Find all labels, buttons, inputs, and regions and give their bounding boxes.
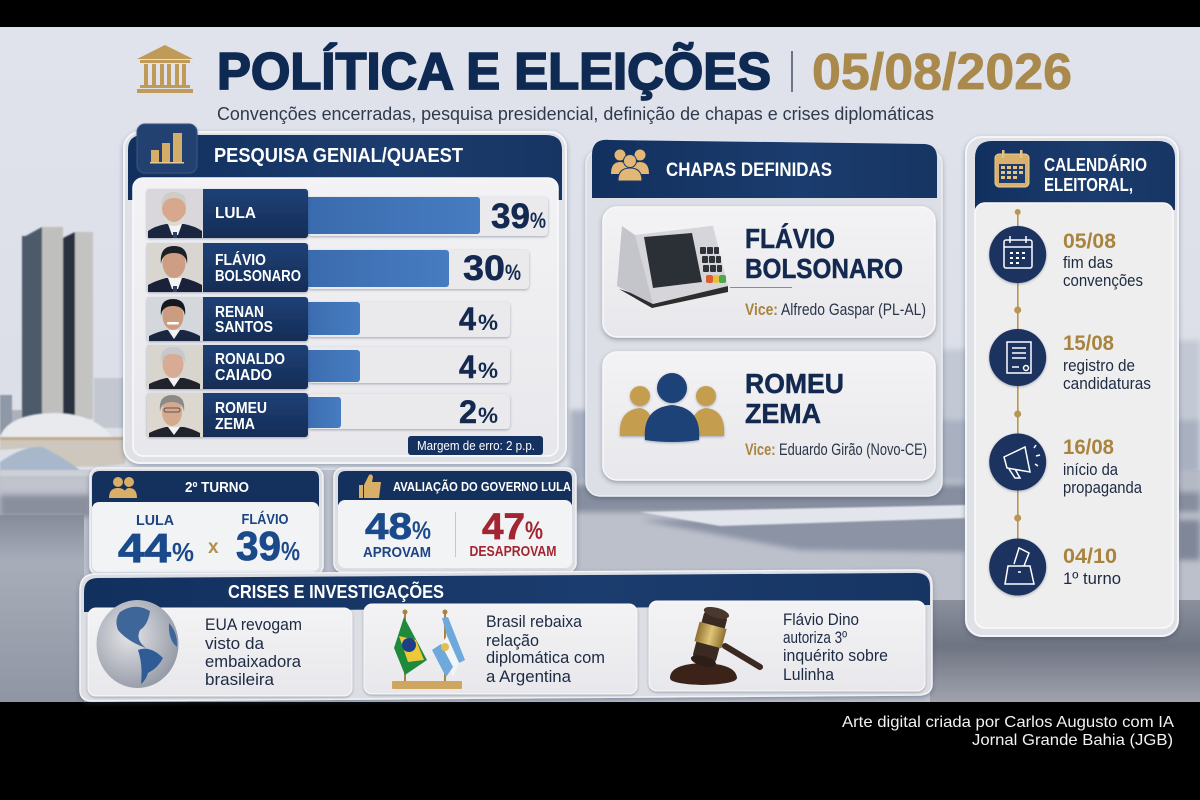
card: Flávio Bolsonaro: BOLSONARO bbox=[745, 253, 903, 284]
heading: crises: CRISES E INVESTIGAÇÕES bbox=[228, 581, 444, 602]
row: Ronaldo Caiado 4%: RONALDO bbox=[215, 351, 285, 368]
card: Flávio Dino: Flávio Dino bbox=[783, 610, 859, 629]
event: 15/08: 15/08 bbox=[1063, 332, 1114, 355]
event: 16/08: início da bbox=[1063, 461, 1119, 479]
card: EUA bbox=[88, 600, 352, 696]
panel: avaliação do governo Lula: 48 bbox=[365, 506, 412, 547]
panel: Chapas Definidas bbox=[586, 140, 942, 496]
event: 05/08 bbox=[989, 226, 1143, 290]
panel: 2º turno bbox=[90, 468, 323, 575]
card: Flávio Dino: autoriza 3º bbox=[783, 628, 847, 647]
row: Ronaldo Caiado 4%: CAIADO bbox=[215, 367, 272, 384]
photo: Lula bbox=[147, 189, 203, 238]
panel: avaliação do governo Lula: AVALIAÇÃO DO GOVERNO LULA bbox=[393, 479, 571, 494]
row: Flávio Bolsonaro 30%: % bbox=[505, 260, 521, 285]
row: Ronaldo Caiado 4%: % bbox=[478, 358, 498, 383]
panel: 2º turno: % bbox=[281, 536, 300, 566]
icon: gavel bbox=[670, 604, 760, 685]
row: Flávio Bolsonaro 30%: BOLSONARO bbox=[215, 268, 301, 285]
card: Brasil e Argentina: diplomática com bbox=[486, 648, 605, 667]
icon: flags bbox=[392, 610, 465, 689]
event: 16/08: 16/08 bbox=[1063, 436, 1114, 459]
row: Lula 39%: % bbox=[530, 208, 546, 233]
row: Flávio Bolsonaro 30% bbox=[147, 243, 529, 292]
panel header bbox=[92, 471, 319, 507]
heading: calendário: CALENDÁRIO bbox=[1044, 154, 1147, 175]
card: Flávio Bolsonaro: Vice: Alfredo Gaspar (PL-AL) bbox=[745, 301, 926, 319]
event: 04/10: 1º turno bbox=[1063, 570, 1121, 588]
photo: Romeu Zema bbox=[147, 393, 203, 437]
row: Renan Santos 4% bbox=[147, 297, 510, 341]
panel header bbox=[128, 135, 562, 200]
card: Flávio Bolsonaro: FLÁVIO bbox=[745, 223, 835, 254]
credit text: Jornal Grande Bahia (JGB) bbox=[972, 732, 1173, 749]
icon: group of people bbox=[611, 150, 649, 181]
panel header bbox=[592, 140, 937, 198]
panel: avaliação do governo Lula: 47 bbox=[482, 506, 525, 547]
row: Renan Santos 4%: RENAN bbox=[215, 304, 264, 321]
row: Lula 39% bbox=[147, 189, 548, 238]
card: Romeu Zema: ROMEU bbox=[745, 368, 844, 399]
row: Ronaldo Caiado 4%: 4 bbox=[459, 349, 476, 385]
panel: avaliação do governo Lula: % bbox=[412, 517, 431, 545]
event: 15/08: candidaturas bbox=[1063, 375, 1151, 393]
timeline line bbox=[1014, 209, 1021, 542]
subtitle: Convenções encerradas, pesquisa presidencial, definição de chapas e crises diplomáticas bbox=[217, 104, 934, 124]
credit text: Arte digital criada por Carlos Augusto com IA bbox=[842, 714, 1174, 731]
card: Flávio Bolsonaro bbox=[603, 207, 935, 337]
credit text bbox=[842, 714, 1174, 749]
panel: Calendário Eleitoral bbox=[966, 137, 1178, 636]
photo: Flávio Bolsonaro bbox=[147, 243, 203, 292]
panel: avaliação do governo Lula: % bbox=[525, 517, 543, 545]
event: 15/08 bbox=[989, 329, 1151, 393]
row: Lula 39%: LULA bbox=[215, 205, 256, 222]
row: Romeu Zema 2%: ROMEU bbox=[215, 400, 267, 417]
icon: calendar bbox=[1004, 236, 1032, 268]
icon: two people bbox=[109, 477, 137, 498]
event: 15/08: registro de bbox=[1063, 357, 1135, 375]
card: Flávio Dino: Lulinha bbox=[783, 665, 835, 684]
event: 04/10 bbox=[989, 538, 1121, 596]
card: Romeu Zema: ZEMA bbox=[745, 398, 821, 429]
panel: avaliação do governo Lula: DESAPROVAM bbox=[470, 543, 556, 560]
card: EUA: embaixadora bbox=[205, 652, 302, 671]
card: Brasil e Argentina: relação bbox=[486, 631, 539, 650]
note: margem de erro: Margem de erro: 2 p.p. bbox=[417, 438, 535, 453]
row: Ronaldo Caiado 4% bbox=[147, 345, 510, 389]
card: Flávio Dino: inquérito sobre bbox=[783, 646, 888, 665]
panel: 2º turno: 2º TURNO bbox=[185, 480, 249, 496]
card: Romeu Zema bbox=[603, 352, 935, 480]
card: Flávio Dino bbox=[649, 601, 925, 691]
row: Flávio Bolsonaro 30%: FLÁVIO bbox=[215, 250, 266, 269]
panel header bbox=[338, 471, 572, 505]
panel: 2º turno: 39 bbox=[236, 523, 281, 569]
row: Romeu Zema 2% bbox=[147, 393, 510, 437]
panel: 2º turno: LULA bbox=[136, 512, 174, 529]
card: EUA: EUA revogam bbox=[205, 615, 302, 634]
panel: Crises e Investigações bbox=[80, 570, 932, 701]
photo: Ronaldo Caiado bbox=[147, 345, 203, 389]
panel header bbox=[975, 141, 1175, 210]
event: 16/08 bbox=[989, 434, 1143, 497]
icon: calendar bbox=[995, 150, 1029, 187]
event: 05/08: 05/08 bbox=[1063, 230, 1116, 253]
icon: document bbox=[1007, 342, 1031, 373]
photo: Renan Santos bbox=[147, 297, 203, 341]
card: EUA: visto da bbox=[205, 634, 265, 653]
event: 05/08: convenções bbox=[1063, 272, 1143, 290]
row: Renan Santos 4%: 4 bbox=[459, 301, 476, 337]
row: Romeu Zema 2%: 2 bbox=[459, 394, 477, 430]
row: Romeu Zema 2%: ZEMA bbox=[215, 416, 255, 433]
icon: megaphone bbox=[1004, 445, 1040, 478]
event: 16/08: propaganda bbox=[1063, 479, 1143, 497]
panel: avaliação do governo Lula bbox=[334, 468, 576, 572]
row: Renan Santos 4%: % bbox=[478, 310, 498, 335]
card: Romeu Zema: Vice: Eduardo Girão (Novo-CE) bbox=[745, 441, 927, 459]
panel header bbox=[84, 573, 930, 612]
row: Romeu Zema 2%: % bbox=[478, 403, 498, 428]
icon: ballot box bbox=[1005, 548, 1034, 584]
panel: 2º turno: x bbox=[208, 537, 219, 558]
heading: date: 05/08/2026 bbox=[812, 43, 1072, 100]
event: 05/08: fim das bbox=[1063, 254, 1113, 272]
icon: thumbs up bbox=[359, 474, 381, 498]
row: Lula 39%: 39 bbox=[491, 197, 530, 236]
heading: chapas: CHAPAS DEFINIDAS bbox=[666, 160, 832, 181]
card: EUA: brasileira bbox=[205, 670, 275, 689]
card: Brasil e Argentina bbox=[364, 604, 637, 694]
icon: voting machine bbox=[617, 222, 792, 308]
panel: Calendário Eleitoral: ELEITORAL, bbox=[1044, 175, 1133, 195]
panel: avaliação do governo Lula: APROVAM bbox=[363, 544, 431, 561]
icon: candidates group bbox=[620, 373, 724, 442]
panel: 2º turno: FLÁVIO bbox=[242, 511, 289, 528]
row: Renan Santos 4%: SANTOS bbox=[215, 319, 273, 336]
panel: Pesquisa Genial/Quaest bbox=[124, 124, 566, 463]
event: 04/10: 04/10 bbox=[1063, 545, 1117, 568]
card: Brasil e Argentina: a Argentina bbox=[486, 667, 572, 686]
heading: pesquisa: PESQUISA GENIAL/QUAEST bbox=[214, 145, 463, 167]
icon: bar chart bbox=[137, 124, 197, 173]
panel: 2º turno: 44 bbox=[118, 525, 171, 571]
row: Flávio Bolsonaro 30%: 30 bbox=[463, 249, 505, 288]
card: Brasil e Argentina: Brasil rebaixa bbox=[486, 612, 582, 631]
panel: 2º turno: % bbox=[172, 537, 194, 567]
title block bbox=[137, 42, 1072, 124]
heading: Política e Eleições: POLÍTICA E ELEIÇÕES bbox=[217, 42, 771, 101]
icon: globe bbox=[96, 600, 178, 688]
icon: government building bbox=[137, 45, 193, 93]
